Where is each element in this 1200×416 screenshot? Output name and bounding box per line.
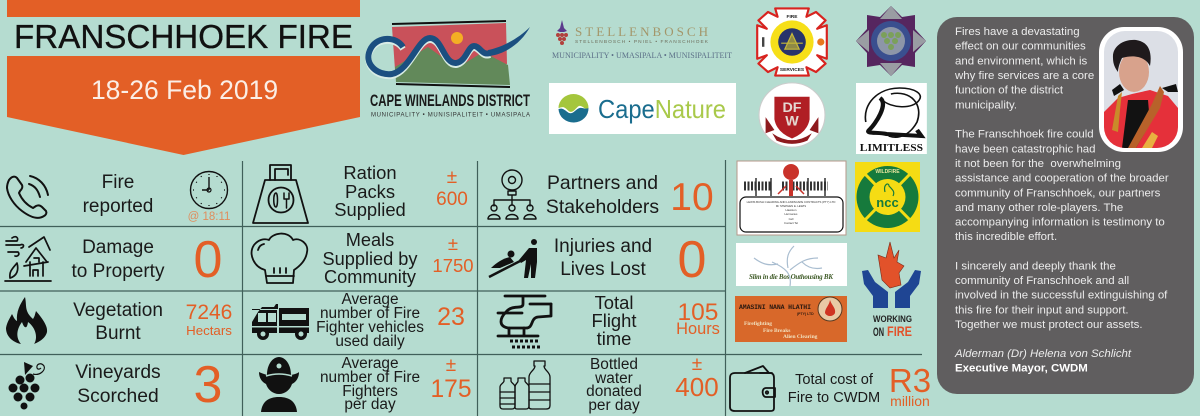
label: number of Fire <box>320 305 420 322</box>
statement text <box>954 26 1169 375</box>
statement text: it not been for the overwhelming <box>955 158 1121 170</box>
logo: Cape Winelands District: CAPE WINELANDS DISTRICT <box>370 91 530 110</box>
logo: ant landscaping: Contact Tel <box>784 221 798 225</box>
label: Stakeholders <box>546 196 659 218</box>
orange chevron <box>7 56 360 155</box>
logo: ant landscaping: Hawston <box>786 208 797 212</box>
label: to Property <box>72 261 165 282</box>
value: 400 <box>675 372 719 402</box>
icon: helicopter <box>498 296 551 336</box>
label: Meals <box>346 230 394 250</box>
label: Partners and <box>547 172 658 194</box>
stat: fire fighters <box>259 355 472 413</box>
statement text: Together we must protect our assets. <box>955 319 1143 331</box>
value: 175 <box>430 376 472 403</box>
logo: DFW badge: DF <box>782 99 802 115</box>
stat: bottled water <box>500 354 719 414</box>
logo: ant landscaping: Cell <box>789 217 794 221</box>
header banner <box>7 0 360 155</box>
logo: Stellenbosch: MUNICIPALITY • UMASIPALA • MUNISIPALITEIT <box>552 51 732 60</box>
logo: ant landscaping: LEWIS BUSH CLEARING AND LANDSCAPE CONTRACTS (PTY) LTD <box>747 200 835 204</box>
stat: ration packs <box>253 162 468 223</box>
statement text: accompanying information is testimony to <box>955 216 1165 228</box>
logo: Limitless: LIMITLESS <box>860 142 923 154</box>
logo: Stellenbosch: STELLENBOSCH <box>575 24 708 39</box>
logo: Amasini Nana Hlathi: Alien Clearing <box>783 334 818 340</box>
statement text: community of Franschhoek and all <box>955 275 1129 287</box>
statement text: Fires have a devastating <box>955 26 1080 38</box>
stat: vegetation burnt <box>6 297 232 344</box>
icon: bag <box>253 165 308 223</box>
statement text: community of Franschhoek, our partners <box>955 187 1161 199</box>
statement text: I sincerely and deeply thank the <box>955 260 1116 272</box>
label: Total <box>595 292 633 313</box>
logo: Slim in die Bos: Slim in die Bos Outhousing BK <box>749 273 834 281</box>
label: Vineyards <box>75 362 161 383</box>
logo: Amasini Nana Hlathi <box>735 296 847 342</box>
label: reported <box>83 196 153 217</box>
value: ± <box>446 355 456 376</box>
statement text: assistance and cooperation of the broader <box>955 173 1169 185</box>
logo: winelands fire badge <box>856 6 926 76</box>
logo: NCC wildfire: WILDFIRE <box>875 169 900 175</box>
icon: flame <box>6 297 47 344</box>
title: FRANSCHHOEK FIRE <box>14 19 353 56</box>
icon: stretcher <box>489 239 537 278</box>
logo: ant landscaping: Mr STEPHEN E. LEWIS <box>776 204 806 208</box>
logo: Amasini Nana Hlathi: (PTY) LTD <box>797 312 814 316</box>
logo: NCC wildfire: ncc <box>876 195 899 210</box>
portrait <box>1099 27 1183 152</box>
statement text: and many other role-players. The <box>955 202 1123 214</box>
value: 7246 <box>186 301 232 324</box>
time: @ 18:11 <box>188 211 230 223</box>
stat: vineyards <box>8 356 222 414</box>
stat: meals <box>252 230 474 287</box>
label: Fire to CWDM <box>788 390 880 406</box>
logo: CapeNature <box>549 83 736 134</box>
icon: bottles <box>500 361 550 409</box>
value: ± <box>447 167 457 188</box>
label: Burnt <box>95 323 141 344</box>
stat: fire reported <box>7 172 230 223</box>
logo: NCC wildfire <box>855 162 920 232</box>
icon: clock <box>190 172 228 208</box>
stat: partners <box>488 170 714 219</box>
label: Lives Lost <box>560 259 646 280</box>
statement text: Alderman (Dr) Helena von Schlicht <box>954 348 1132 360</box>
label: water <box>594 370 633 387</box>
logo: Working on Fire: ON <box>873 325 884 339</box>
label: Damage <box>82 237 154 258</box>
logo: CapeNature: CapeNature <box>598 94 726 124</box>
label: number of Fire <box>320 369 420 386</box>
label: Flight <box>592 310 636 331</box>
value: 0 <box>678 231 706 289</box>
logo: Amasini Nana Hlathi: Fire Breaks <box>763 328 790 334</box>
stat: total cost <box>730 362 931 411</box>
statement text: effect on our communities <box>955 41 1086 53</box>
label: Vegetation <box>73 300 163 321</box>
value: R3 <box>889 362 931 399</box>
value: 1750 <box>432 255 474 276</box>
label: Total cost of <box>795 372 874 388</box>
statement text: this incredible effort. <box>955 231 1057 243</box>
label: Supplied by <box>322 249 418 269</box>
logo: ant landscaping <box>737 161 846 235</box>
statement text: why fire services are a core <box>954 70 1094 82</box>
icon: fire fighter <box>259 357 299 412</box>
date: 18-26 Feb 2019 <box>91 75 278 105</box>
value: 105 <box>678 299 718 326</box>
logo: Limitless <box>856 83 927 154</box>
label: used daily <box>335 333 405 350</box>
statement text: municipality. <box>955 99 1017 111</box>
label: Community <box>324 267 417 287</box>
logo: fire services badge <box>757 8 827 76</box>
logo: Cape Winelands District <box>368 21 530 118</box>
logo: Working on Fire: FIRE <box>887 323 912 339</box>
label: per day <box>588 397 640 414</box>
label: Average <box>341 291 399 308</box>
stat: vehicles <box>252 291 465 350</box>
logo: Working on Fire <box>862 242 921 339</box>
icon: fire truck <box>252 304 309 340</box>
label: Scorched <box>77 386 159 407</box>
unit: million <box>890 393 930 409</box>
logo: Stellenbosch <box>552 20 732 60</box>
logo: fire services badge: FIRE <box>787 14 798 20</box>
value: 0 <box>194 231 222 289</box>
logo: Amasini Nana Hlathi: Firefighting <box>744 321 772 327</box>
logo: Cape Winelands District: MUNICIPALITY • MUNISIPALITEIT • UMASIPALA <box>371 112 530 118</box>
unit: Hours <box>676 320 720 338</box>
logo: fire services badge: SERVICES <box>780 67 805 73</box>
stat: injuries <box>489 231 706 289</box>
statement text: have been catastrophic had <box>955 143 1096 155</box>
top orange bar <box>7 0 360 17</box>
value: ± <box>692 354 702 375</box>
icon: house in wind <box>5 237 51 281</box>
stat: flight time <box>498 292 720 349</box>
label: time <box>597 328 631 349</box>
statement text: this fire for their input and support. <box>955 304 1129 316</box>
stat: damage to property <box>5 231 222 289</box>
value: 10 <box>670 176 714 219</box>
label: Ration <box>343 162 397 183</box>
icon: wallet <box>730 366 775 411</box>
logo: Working on Fire: WORKING <box>873 314 912 325</box>
value: ± <box>448 233 458 254</box>
statement text: function of the district <box>955 85 1064 97</box>
label: per day <box>344 396 396 413</box>
statement text: Executive Mayor, CWDM <box>955 363 1088 375</box>
logo: Slim in die Bos <box>736 243 847 286</box>
logo: Stellenbosch: STELLENBOSCH • PNIEL • FRANSCHHOEK <box>575 39 709 45</box>
icon: grapes <box>8 362 40 410</box>
value: 23 <box>437 303 465 331</box>
statement text: The Franschhoek fire could <box>955 129 1094 141</box>
label: Fire <box>102 172 134 193</box>
statement text: and environment, which is <box>955 55 1088 67</box>
label: Fighter vehicles <box>316 319 424 336</box>
label: Bottled <box>590 356 638 373</box>
label: donated <box>586 383 642 400</box>
label: Average <box>341 355 399 372</box>
label: Injuries and <box>554 236 652 257</box>
logo: DFW badge: W <box>785 113 799 129</box>
label: Packs <box>345 181 395 202</box>
icon: chef hat <box>252 234 307 283</box>
label: Supplied <box>334 199 406 220</box>
unit: Hectars <box>186 323 232 338</box>
icon: bulb network <box>488 170 536 219</box>
icon: phone <box>7 176 48 218</box>
label: Fighters <box>342 383 398 400</box>
value: 600 <box>436 189 468 210</box>
statement text: involved in the successful extinguishing of <box>955 290 1168 302</box>
logo: Amasini Nana Hlathi: AMASINI NANA HLATHI <box>739 304 811 311</box>
value: 3 <box>194 356 222 414</box>
logo: ant landscaping: Hermanus <box>785 212 798 216</box>
logo: DFW badge <box>759 83 825 147</box>
panel: mayor statement <box>937 17 1194 394</box>
